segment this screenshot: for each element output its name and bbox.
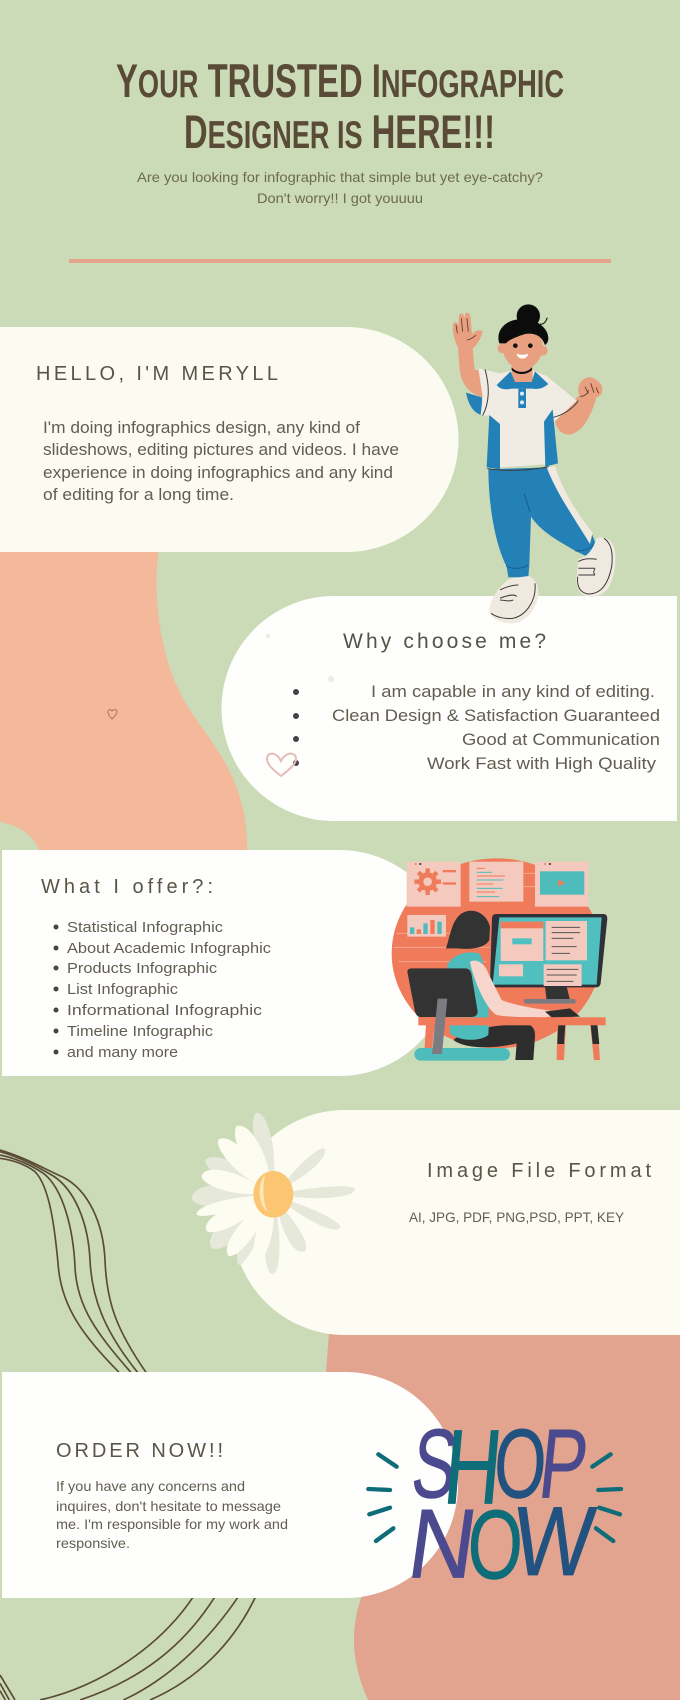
front petals bbox=[195, 1121, 280, 1263]
list: offers: List Infographic bbox=[67, 981, 179, 998]
illustration: daisy bbox=[192, 1111, 355, 1275]
title: YOUR TRUSTED INFOGRAPHIC bbox=[116, 54, 564, 107]
right arm bbox=[555, 396, 597, 435]
pants bbox=[488, 467, 597, 577]
text: order details: inquires, don't hesitate to message bbox=[56, 1498, 281, 1514]
chair post bbox=[432, 999, 447, 1054]
collar bbox=[497, 371, 548, 389]
heading: image file format: Image File Format bbox=[427, 1160, 651, 1182]
text: about me: experience in doing infographics and any kind bbox=[43, 464, 393, 482]
faint dots bbox=[266, 634, 334, 682]
person torso bbox=[447, 952, 489, 1040]
lower shoe bbox=[489, 576, 538, 623]
title: DESIGNER IS HERE!!! bbox=[184, 105, 495, 158]
lettering: W bbox=[508, 1487, 600, 1596]
panel: image file format bbox=[233, 1110, 680, 1335]
window: gear bbox=[407, 862, 461, 907]
lettering: S bbox=[407, 1408, 463, 1518]
text: order details: If you have any concerns and bbox=[56, 1478, 245, 1494]
lettering: O bbox=[466, 1490, 525, 1600]
heading: why choose me: Why choose me? bbox=[343, 630, 546, 653]
pants stripe bbox=[547, 466, 593, 544]
panel: what I offer bbox=[2, 850, 452, 1076]
orange backdrop bbox=[392, 858, 602, 1048]
neck bbox=[512, 365, 533, 386]
neck band bbox=[512, 367, 532, 374]
list: offers: Products Infographic bbox=[67, 960, 218, 977]
icon: small heart bbox=[108, 710, 117, 719]
lettering: O bbox=[492, 1409, 549, 1518]
list: reasons: Work Fast with High Quality bbox=[427, 754, 657, 773]
illustration: waving character bbox=[453, 304, 616, 623]
text: about me: I'm doing infographics design, any kind of bbox=[43, 419, 360, 437]
list: offers bbox=[54, 919, 272, 1061]
text: about me: of editing for a long time. bbox=[43, 486, 234, 504]
monitor stand bbox=[545, 987, 570, 1000]
divider rule bbox=[69, 259, 611, 263]
buttons bbox=[520, 392, 524, 404]
window: video bbox=[535, 862, 588, 907]
person legs bbox=[453, 1025, 535, 1060]
lettering: P bbox=[534, 1409, 593, 1519]
panel: hello bbox=[0, 327, 459, 552]
placket bbox=[518, 389, 526, 408]
chair back bbox=[407, 968, 478, 1017]
pants cuffs bbox=[506, 493, 594, 568]
head bbox=[498, 304, 548, 369]
window: bar chart bbox=[407, 915, 446, 937]
blob: salmon lower right bbox=[326, 1320, 680, 1700]
decorative curved lines upper bbox=[0, 1150, 147, 1373]
text: about me bbox=[43, 419, 399, 504]
subtitle bbox=[137, 169, 543, 206]
hair bun bbox=[517, 304, 540, 328]
icon: large heart bbox=[267, 754, 296, 776]
burst lines bbox=[368, 1454, 621, 1541]
illustration: shop now bbox=[368, 1407, 621, 1600]
flower centre bbox=[253, 1171, 293, 1218]
hair bbox=[498, 319, 548, 345]
list: reasons: Clean Design & Satisfaction Guaranteed bbox=[332, 706, 660, 725]
lettering: H bbox=[440, 1407, 507, 1526]
text: order details bbox=[56, 1478, 288, 1551]
back petals bbox=[192, 1111, 355, 1275]
lettering: N bbox=[402, 1490, 483, 1599]
blob: peach upper left bbox=[0, 545, 247, 852]
list: reasons: I am capable in any kind of editing. bbox=[371, 682, 655, 701]
desk top bbox=[418, 1017, 606, 1025]
keyboard bbox=[545, 1008, 580, 1017]
panel: why choose me bbox=[222, 596, 677, 821]
lettering bbox=[402, 1407, 600, 1600]
text: about me: slideshows, editing pictures and videos. I have bbox=[43, 441, 399, 459]
subtitle: Are you looking for infographic that simple but yet eye-catchy? bbox=[137, 169, 543, 185]
list: offers: Informational Infographic bbox=[67, 1002, 263, 1019]
monitor bbox=[490, 914, 607, 987]
heading: order now: ORDER NOW!! bbox=[56, 1440, 223, 1462]
text: order details: me. I'm responsible for my work and bbox=[56, 1516, 288, 1532]
eyes bbox=[513, 343, 533, 348]
upper shoe bbox=[576, 537, 616, 597]
desk legs bbox=[424, 1023, 600, 1060]
sleeve back bbox=[466, 393, 483, 415]
window: code bbox=[469, 862, 523, 902]
decorative curved lines lower bbox=[0, 1597, 256, 1700]
shirt seams bbox=[483, 369, 578, 470]
mouth bbox=[516, 354, 528, 359]
shirt bbox=[478, 368, 577, 468]
list: offers: About Academic Infographic bbox=[67, 940, 272, 957]
person hair bbox=[446, 911, 490, 949]
fist bbox=[578, 377, 602, 398]
panel: order now bbox=[2, 1372, 458, 1598]
heading: what I offer: What I offer?: bbox=[41, 876, 213, 898]
shirt side panels bbox=[487, 409, 558, 469]
subtitle: Don't worry!! I got youuuu bbox=[257, 190, 423, 206]
seat base bbox=[414, 1048, 510, 1061]
backdrop stripes bbox=[393, 873, 537, 962]
text: formats: AI, JPG, PDF, PNG,PSD, PPT, KEY bbox=[409, 1209, 625, 1225]
list: offers: and many more bbox=[67, 1044, 178, 1061]
text: order details: responsive. bbox=[56, 1535, 130, 1551]
title bbox=[116, 54, 564, 158]
list: reasons bbox=[293, 682, 660, 773]
left arm and hand bbox=[453, 313, 483, 397]
list: reasons: Good at Communication bbox=[462, 730, 660, 749]
heading: hello: HELLO, I'M MERYLL bbox=[36, 363, 278, 385]
illustration: designer at desk bbox=[392, 858, 607, 1061]
list: offers: Timeline Infographic bbox=[67, 1023, 214, 1040]
list: offers: Statistical Infographic bbox=[67, 919, 224, 936]
person arm bbox=[470, 961, 557, 1017]
